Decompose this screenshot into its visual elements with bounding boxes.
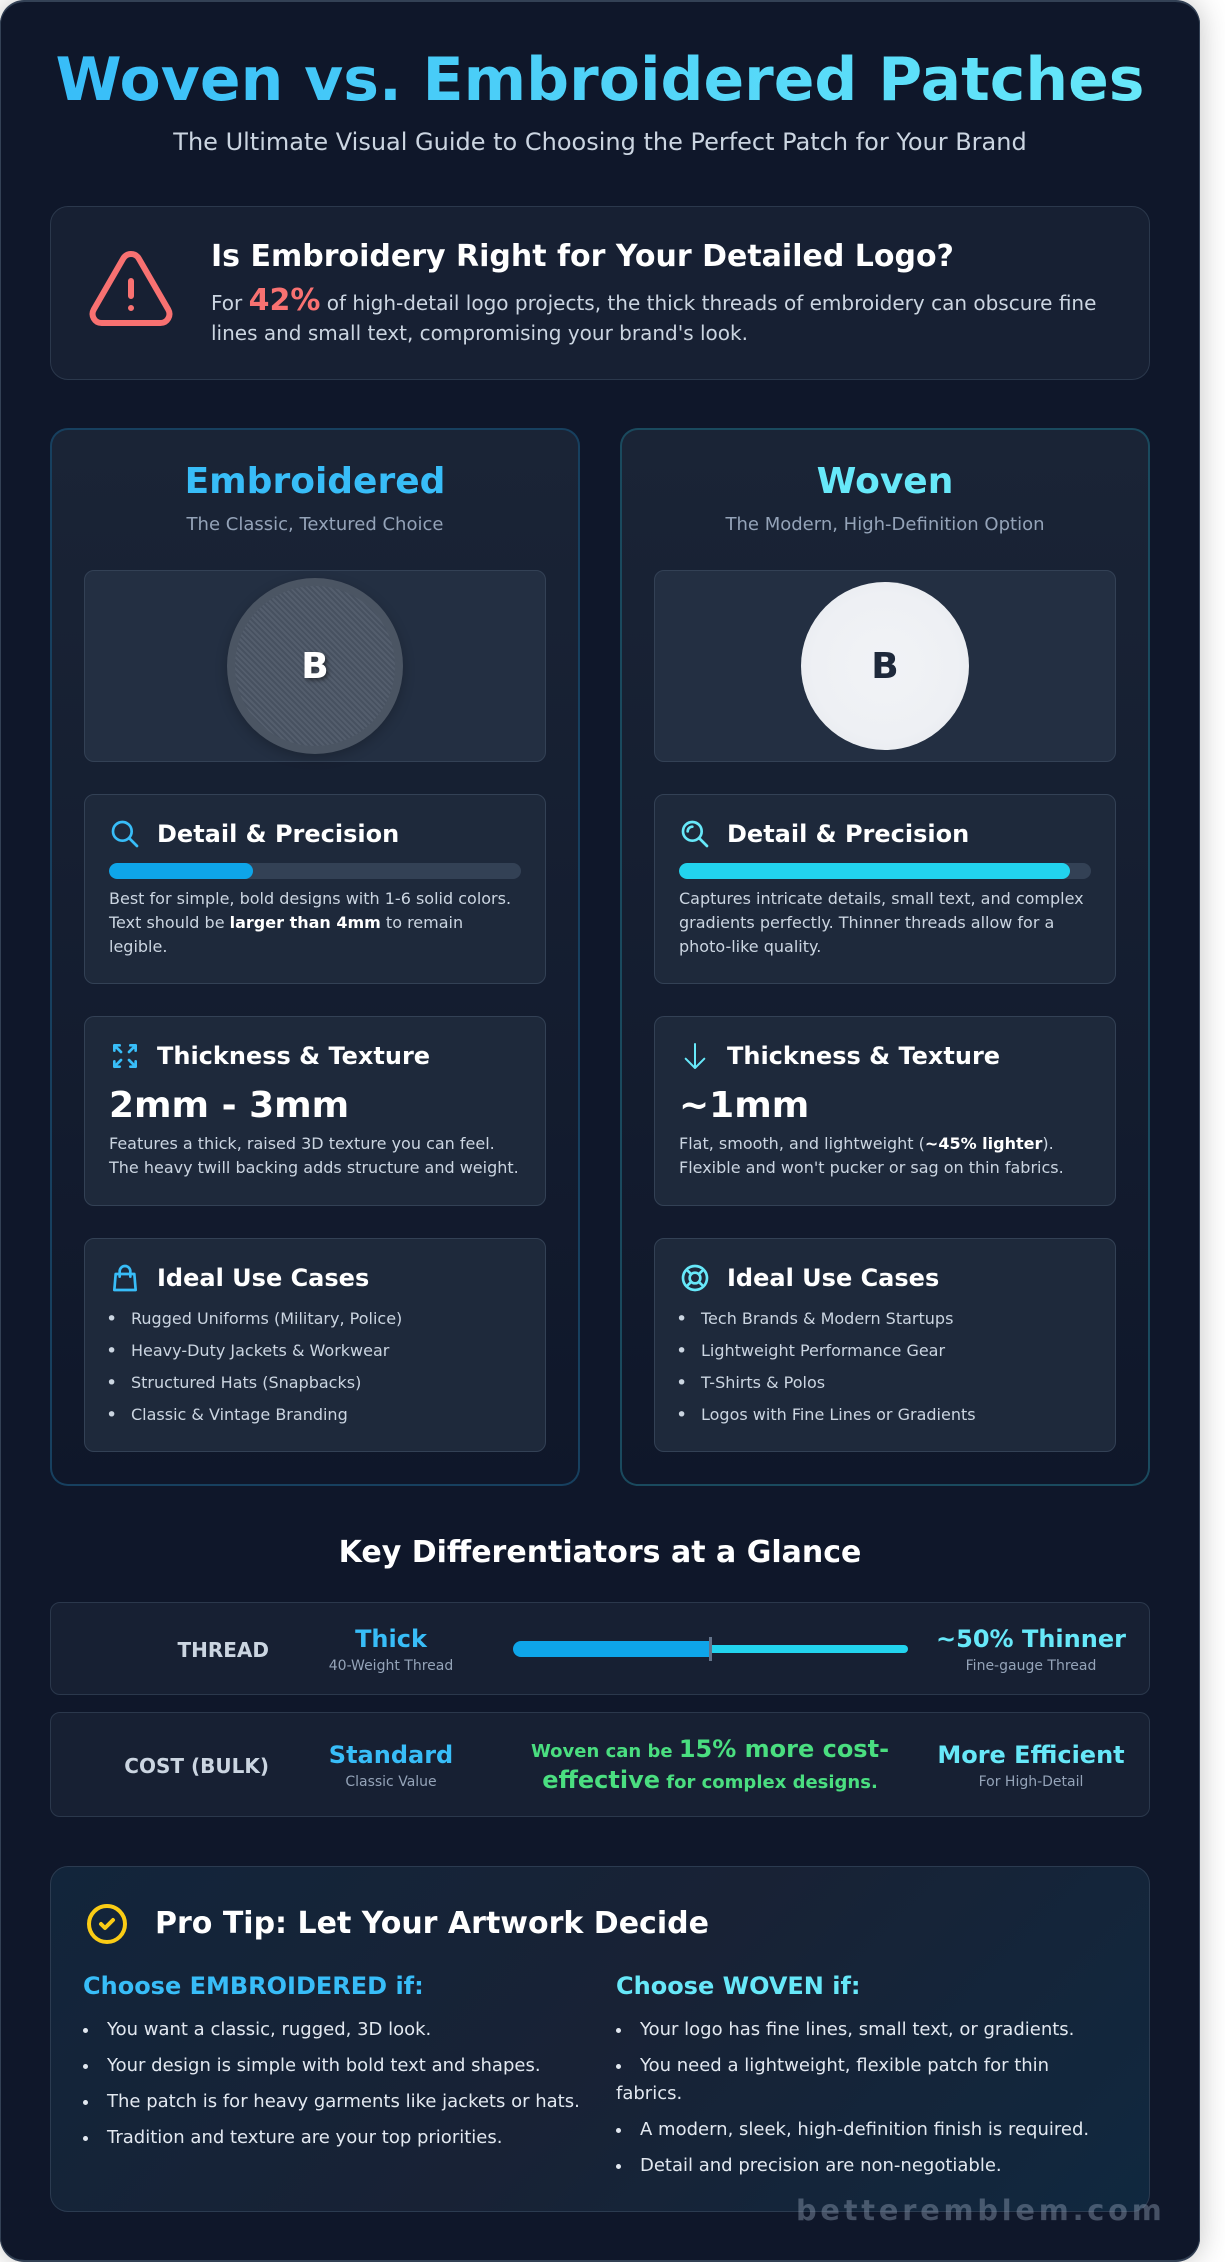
embroidered patch visual xyxy=(84,570,546,762)
cost callout: Woven can be 15% more cost- xyxy=(531,1735,889,1763)
use case list: T-Shirts & Polos xyxy=(701,1373,825,1392)
value: ~50% Thinner xyxy=(936,1625,1126,1653)
icon: expand arrows xyxy=(112,1044,138,1068)
card text: gradients perfectly. Thinner threads allow for a xyxy=(679,913,1054,932)
alert text xyxy=(211,283,1096,345)
use case list: Classic & Vintage Branding xyxy=(131,1405,348,1424)
card: thickness and texture xyxy=(654,1016,1116,1206)
card: detail and precision xyxy=(84,794,546,984)
progress bar xyxy=(679,863,1091,879)
embroidered choice list: Your design is simple with bold text and shapes. xyxy=(107,2055,541,2076)
woven choice list: A modern, sleek, high-definition finish is required. xyxy=(640,2119,1089,2140)
value note: Classic Value xyxy=(345,1774,437,1790)
card text: Flat, smooth, and lightweight (~45% lighter). xyxy=(679,1134,1054,1153)
alert heading: Is Embroidery Right for Your Detailed Logo? xyxy=(211,239,954,274)
woven patch visual xyxy=(654,570,1116,762)
value note: For High-Detail xyxy=(979,1774,1083,1790)
alert text: lines and small text, compromising your brand's look. xyxy=(211,321,748,345)
panel: alert xyxy=(50,206,1150,380)
card: thickness and texture xyxy=(84,1016,546,1206)
use case list xyxy=(108,1309,402,1424)
woven choice list xyxy=(616,2019,1089,2176)
cost callout xyxy=(531,1735,889,1794)
card text: legible. xyxy=(109,937,167,956)
woven tagline: The Modern, High-Definition Option xyxy=(726,514,1044,535)
icon: check circle xyxy=(87,1904,127,1944)
value note: Fine-gauge Thread xyxy=(966,1658,1096,1674)
value: Thick xyxy=(355,1625,427,1653)
woven cost value xyxy=(937,1741,1125,1790)
card: ideal use cases xyxy=(654,1238,1116,1452)
card text: Flexible and won't pucker or sag on thin fabrics. xyxy=(679,1158,1064,1177)
subtitle: The Ultimate Visual Guide to Choosing the Perfect Patch for Your Brand xyxy=(173,128,1027,156)
title: Woven vs. Embroidered Patches xyxy=(56,45,1144,115)
card text: Text should be larger than 4mm to remain xyxy=(109,913,463,932)
embroidered choice list: The patch is for heavy garments like jackets or hats. xyxy=(107,2091,580,2112)
embroidered thread value xyxy=(329,1625,453,1674)
embroidered cost value xyxy=(329,1741,453,1790)
woven thread value xyxy=(936,1625,1126,1674)
card: ideal use cases xyxy=(84,1238,546,1452)
icon: magnifier with highlight xyxy=(682,820,708,848)
card heading: Detail & Precision xyxy=(157,820,399,848)
icon: down arrow xyxy=(684,1043,706,1069)
thickness value: 2mm - 3mm xyxy=(109,1085,349,1126)
use case list: Structured Hats (Snapbacks) xyxy=(131,1373,361,1392)
card text xyxy=(679,1134,1064,1177)
thickness value: ~1mm xyxy=(679,1085,809,1126)
card: detail and precision xyxy=(654,794,1116,984)
card heading: Detail & Precision xyxy=(727,820,969,848)
card heading: Thickness & Texture xyxy=(157,1042,430,1070)
watermark: betteremblem.com xyxy=(796,2193,1166,2227)
patch circle xyxy=(227,578,403,754)
panel: pro tip xyxy=(50,1866,1150,2212)
embroidered choice list xyxy=(83,2019,580,2148)
section heading: key differentiators: Key Differentiators at a Glance xyxy=(339,1535,861,1570)
use case list: Lightweight Performance Gear xyxy=(701,1341,945,1360)
use case list: Logos with Fine Lines or Gradients xyxy=(701,1405,976,1424)
card text xyxy=(679,889,1084,956)
icon: warning triangle xyxy=(90,251,172,326)
woven heading: Woven xyxy=(817,461,953,502)
card text: Best for simple, bold designs with 1-6 solid colors. xyxy=(109,889,511,908)
card text: Features a thick, raised 3D texture you can feel. xyxy=(109,1134,495,1153)
embroidered tagline: The Classic, Textured Choice xyxy=(187,514,443,535)
use case list: Heavy-Duty Jackets & Workwear xyxy=(131,1341,389,1360)
card text xyxy=(108,889,511,956)
alert text: For 42% of high-detail logo projects, the thick threads of embroidery can obscure fine xyxy=(211,283,1096,318)
card text: The heavy twill backing adds structure and weight. xyxy=(109,1158,519,1177)
woven choice list: You need a lightweight, flexible patch for thin fabrics. xyxy=(616,2055,1049,2104)
woven choice heading: Choose WOVEN if: xyxy=(616,1972,860,2000)
value: Standard xyxy=(329,1741,453,1769)
woven choice list: Your logo has fine lines, small text, or gradients. xyxy=(640,2019,1074,2040)
patch circle: B xyxy=(301,646,329,687)
thread comparison bar xyxy=(513,1637,908,1661)
value: More Efficient xyxy=(937,1741,1125,1769)
pro tip heading: Pro Tip: Let Your Artwork Decide xyxy=(155,1906,709,1941)
use case list: Tech Brands & Modern Startups xyxy=(701,1309,953,1328)
progress bar xyxy=(109,863,521,879)
row: thread xyxy=(50,1602,1150,1695)
embroidered choice list: You want a classic, rugged, 3D look. xyxy=(107,2019,431,2040)
row: cost xyxy=(50,1712,1150,1817)
row label: THREAD xyxy=(177,1638,269,1662)
panel: woven column xyxy=(620,428,1150,1486)
card heading: Thickness & Texture xyxy=(727,1042,1000,1070)
card text xyxy=(108,1134,519,1177)
use case list: Rugged Uniforms (Military, Police) xyxy=(131,1309,402,1328)
icon: shopping bag xyxy=(113,1264,137,1292)
card heading: Ideal Use Cases xyxy=(727,1264,939,1292)
icon: magnifier xyxy=(112,820,138,848)
embroidered choice list: Tradition and texture are your top priorities. xyxy=(107,2127,502,2148)
card heading: Ideal Use Cases xyxy=(157,1264,369,1292)
card text: photo-like quality. xyxy=(679,937,821,956)
icon: lifebuoy xyxy=(682,1264,708,1292)
value note: 40-Weight Thread xyxy=(329,1658,453,1674)
embroidered choice heading: Choose EMBROIDERED if: xyxy=(83,1972,424,2000)
panel: embroidered column xyxy=(50,428,580,1486)
use case list xyxy=(678,1309,976,1424)
embroidered heading: Embroidered xyxy=(185,461,445,502)
row label: COST (BULK) xyxy=(124,1754,269,1778)
card text: Captures intricate details, small text, and complex xyxy=(679,889,1084,908)
patch circle xyxy=(801,582,969,750)
woven choice list: Detail and precision are non-negotiable. xyxy=(640,2155,1002,2176)
patch circle: B xyxy=(871,646,899,687)
cost callout: effective for complex designs. xyxy=(542,1766,878,1794)
